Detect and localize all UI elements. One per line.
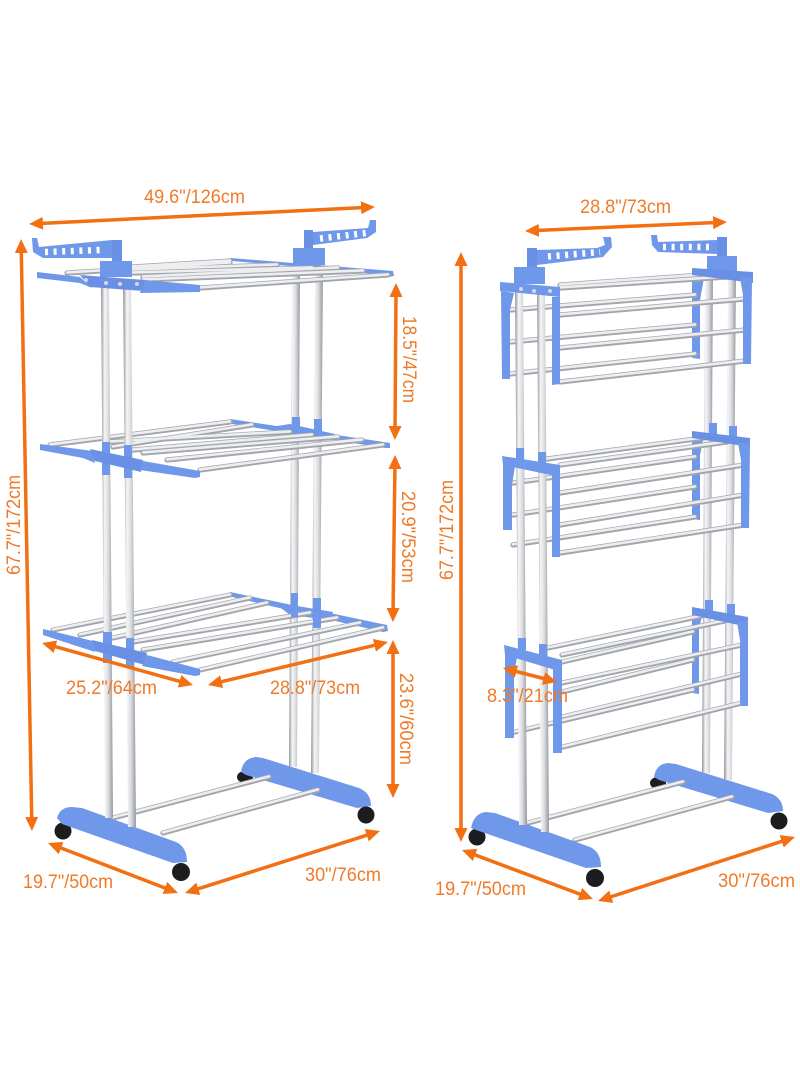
dimension labels: left rack: 20.9"/53cm: [397, 491, 419, 583]
right rack rear poles: [702, 270, 736, 780]
right rack bottom tier crossbars and wings: [504, 600, 748, 753]
right rack middle tier crossbars and wings: [502, 423, 750, 557]
dimension labels: left rack: 23.6"/60cm: [395, 673, 417, 765]
left rack right hanger arm: [304, 220, 376, 248]
right rack top tier rods: [510, 274, 745, 382]
dimension labels: right rack: 19.7"/50cm: [435, 878, 526, 900]
right rack rear hanging wings: [692, 278, 704, 694]
dimension arrows: right rack: [461, 222, 787, 898]
left rack front foot and wheels: [54, 807, 190, 881]
right rack bottom tier rods: [515, 615, 742, 747]
dimension labels: left rack: [3, 186, 420, 893]
left rack left hanger arm: [32, 238, 132, 277]
right rack right hanger arm: [651, 235, 737, 271]
dimension labels: left rack: 19.7"/50cm: [23, 871, 113, 893]
right rack top tier crossbars and wings: [500, 268, 753, 385]
dimension labels: right rack: [435, 196, 795, 900]
right rack back foot and wheel: [650, 763, 788, 830]
dimension labels: right rack: 8.3"/21cm: [487, 685, 568, 707]
dimension labels: left rack: 49.6"/126cm: [144, 186, 245, 208]
right rack: three-tier rack with wings folded down: [468, 235, 788, 887]
left rack middle shelf rods: [50, 421, 383, 470]
right rack front foot and wheels: [468, 812, 604, 887]
left rack back bars of shelves: [230, 258, 394, 632]
left rack rear pole collars: [291, 248, 325, 628]
dimension labels: left rack: 28.8"/73cm: [270, 677, 360, 699]
right rack left hanger arm: [514, 237, 612, 284]
left rack bottom shelf front bar: [43, 629, 200, 676]
right rack middle tier rods: [513, 437, 744, 553]
left rack rear poles: [289, 270, 323, 773]
dimension labels: right rack: 28.8"/73cm: [580, 196, 671, 218]
left rack base rods: [113, 776, 318, 833]
right rack front poles: [515, 290, 549, 832]
left rack bottom shelf rods: [53, 594, 383, 670]
left rack top shelf front bar: [37, 272, 200, 293]
dimension labels: right rack: 30"/76cm: [718, 870, 795, 892]
dimension labels: left rack: 25.2"/64cm: [66, 677, 157, 699]
left rack middle shelf front bar: [40, 442, 200, 478]
dimension labels: left rack: 18.5"/47cm: [398, 316, 420, 403]
left rack back foot and wheel: [237, 757, 374, 824]
left rack: three-tier drying rack, unfolded: [32, 220, 394, 881]
dimension labels: left rack: 67.7"/172cm: [3, 475, 25, 575]
left rack top shelf rods: [67, 260, 388, 288]
dimension arrows: left rack: [21, 207, 396, 891]
dimension labels: left rack: 30"/76cm: [305, 864, 381, 886]
right rack base rods: [528, 781, 732, 840]
left rack front poles: [101, 285, 136, 827]
dimension labels: right rack: 67.7"/172cm: [436, 480, 458, 580]
